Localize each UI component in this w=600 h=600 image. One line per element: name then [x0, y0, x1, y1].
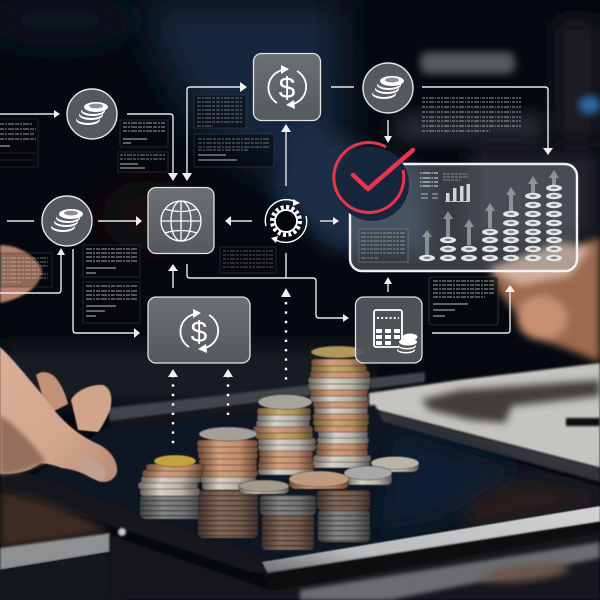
- text block: top right: [422, 98, 521, 131]
- mini bar chart: [443, 174, 470, 202]
- box: wide dollar: $: [191, 316, 208, 349]
- text block: far left upper: [0, 119, 38, 167]
- laptop behind tablet: [106, 363, 600, 482]
- circle: coins upper left: [67, 89, 117, 139]
- loose coins: [239, 456, 419, 494]
- left finger: [0, 245, 42, 303]
- box: calculator: [356, 297, 422, 363]
- stack B: [197, 427, 258, 490]
- right hand: [488, 238, 600, 362]
- tablet: [0, 405, 600, 600]
- arrowheads: [54, 82, 553, 377]
- coin stacks: [138, 346, 419, 496]
- circle: coins top right: [363, 63, 413, 113]
- text block: upper left pair: [118, 120, 168, 172]
- chart panel: [350, 164, 577, 271]
- growth arrows: [422, 170, 559, 255]
- text block: lower left finger: [0, 253, 52, 287]
- text block: middle left pair: [83, 245, 140, 323]
- gear icon: [265, 199, 307, 243]
- left hand: [0, 347, 117, 482]
- box: wide dollar: [148, 297, 250, 363]
- red check mark badge: [334, 142, 413, 221]
- mini legend: [420, 173, 438, 198]
- circle: coins middle left: [42, 196, 92, 246]
- text block: lower right: [429, 277, 498, 325]
- stack C: [253, 394, 316, 475]
- box: top dollar: $: [279, 72, 296, 105]
- chart text block: [359, 229, 408, 262]
- stack D: [308, 346, 371, 468]
- coin columns: [419, 185, 562, 261]
- stack A: [138, 455, 204, 496]
- text block: upper centre pair: [194, 95, 274, 167]
- box: top dollar: [254, 54, 320, 120]
- text block: under gear: [220, 247, 276, 273]
- connectors and arrows: [0, 87, 548, 446]
- box: globe: [148, 188, 214, 254]
- coin reflections: [140, 490, 370, 550]
